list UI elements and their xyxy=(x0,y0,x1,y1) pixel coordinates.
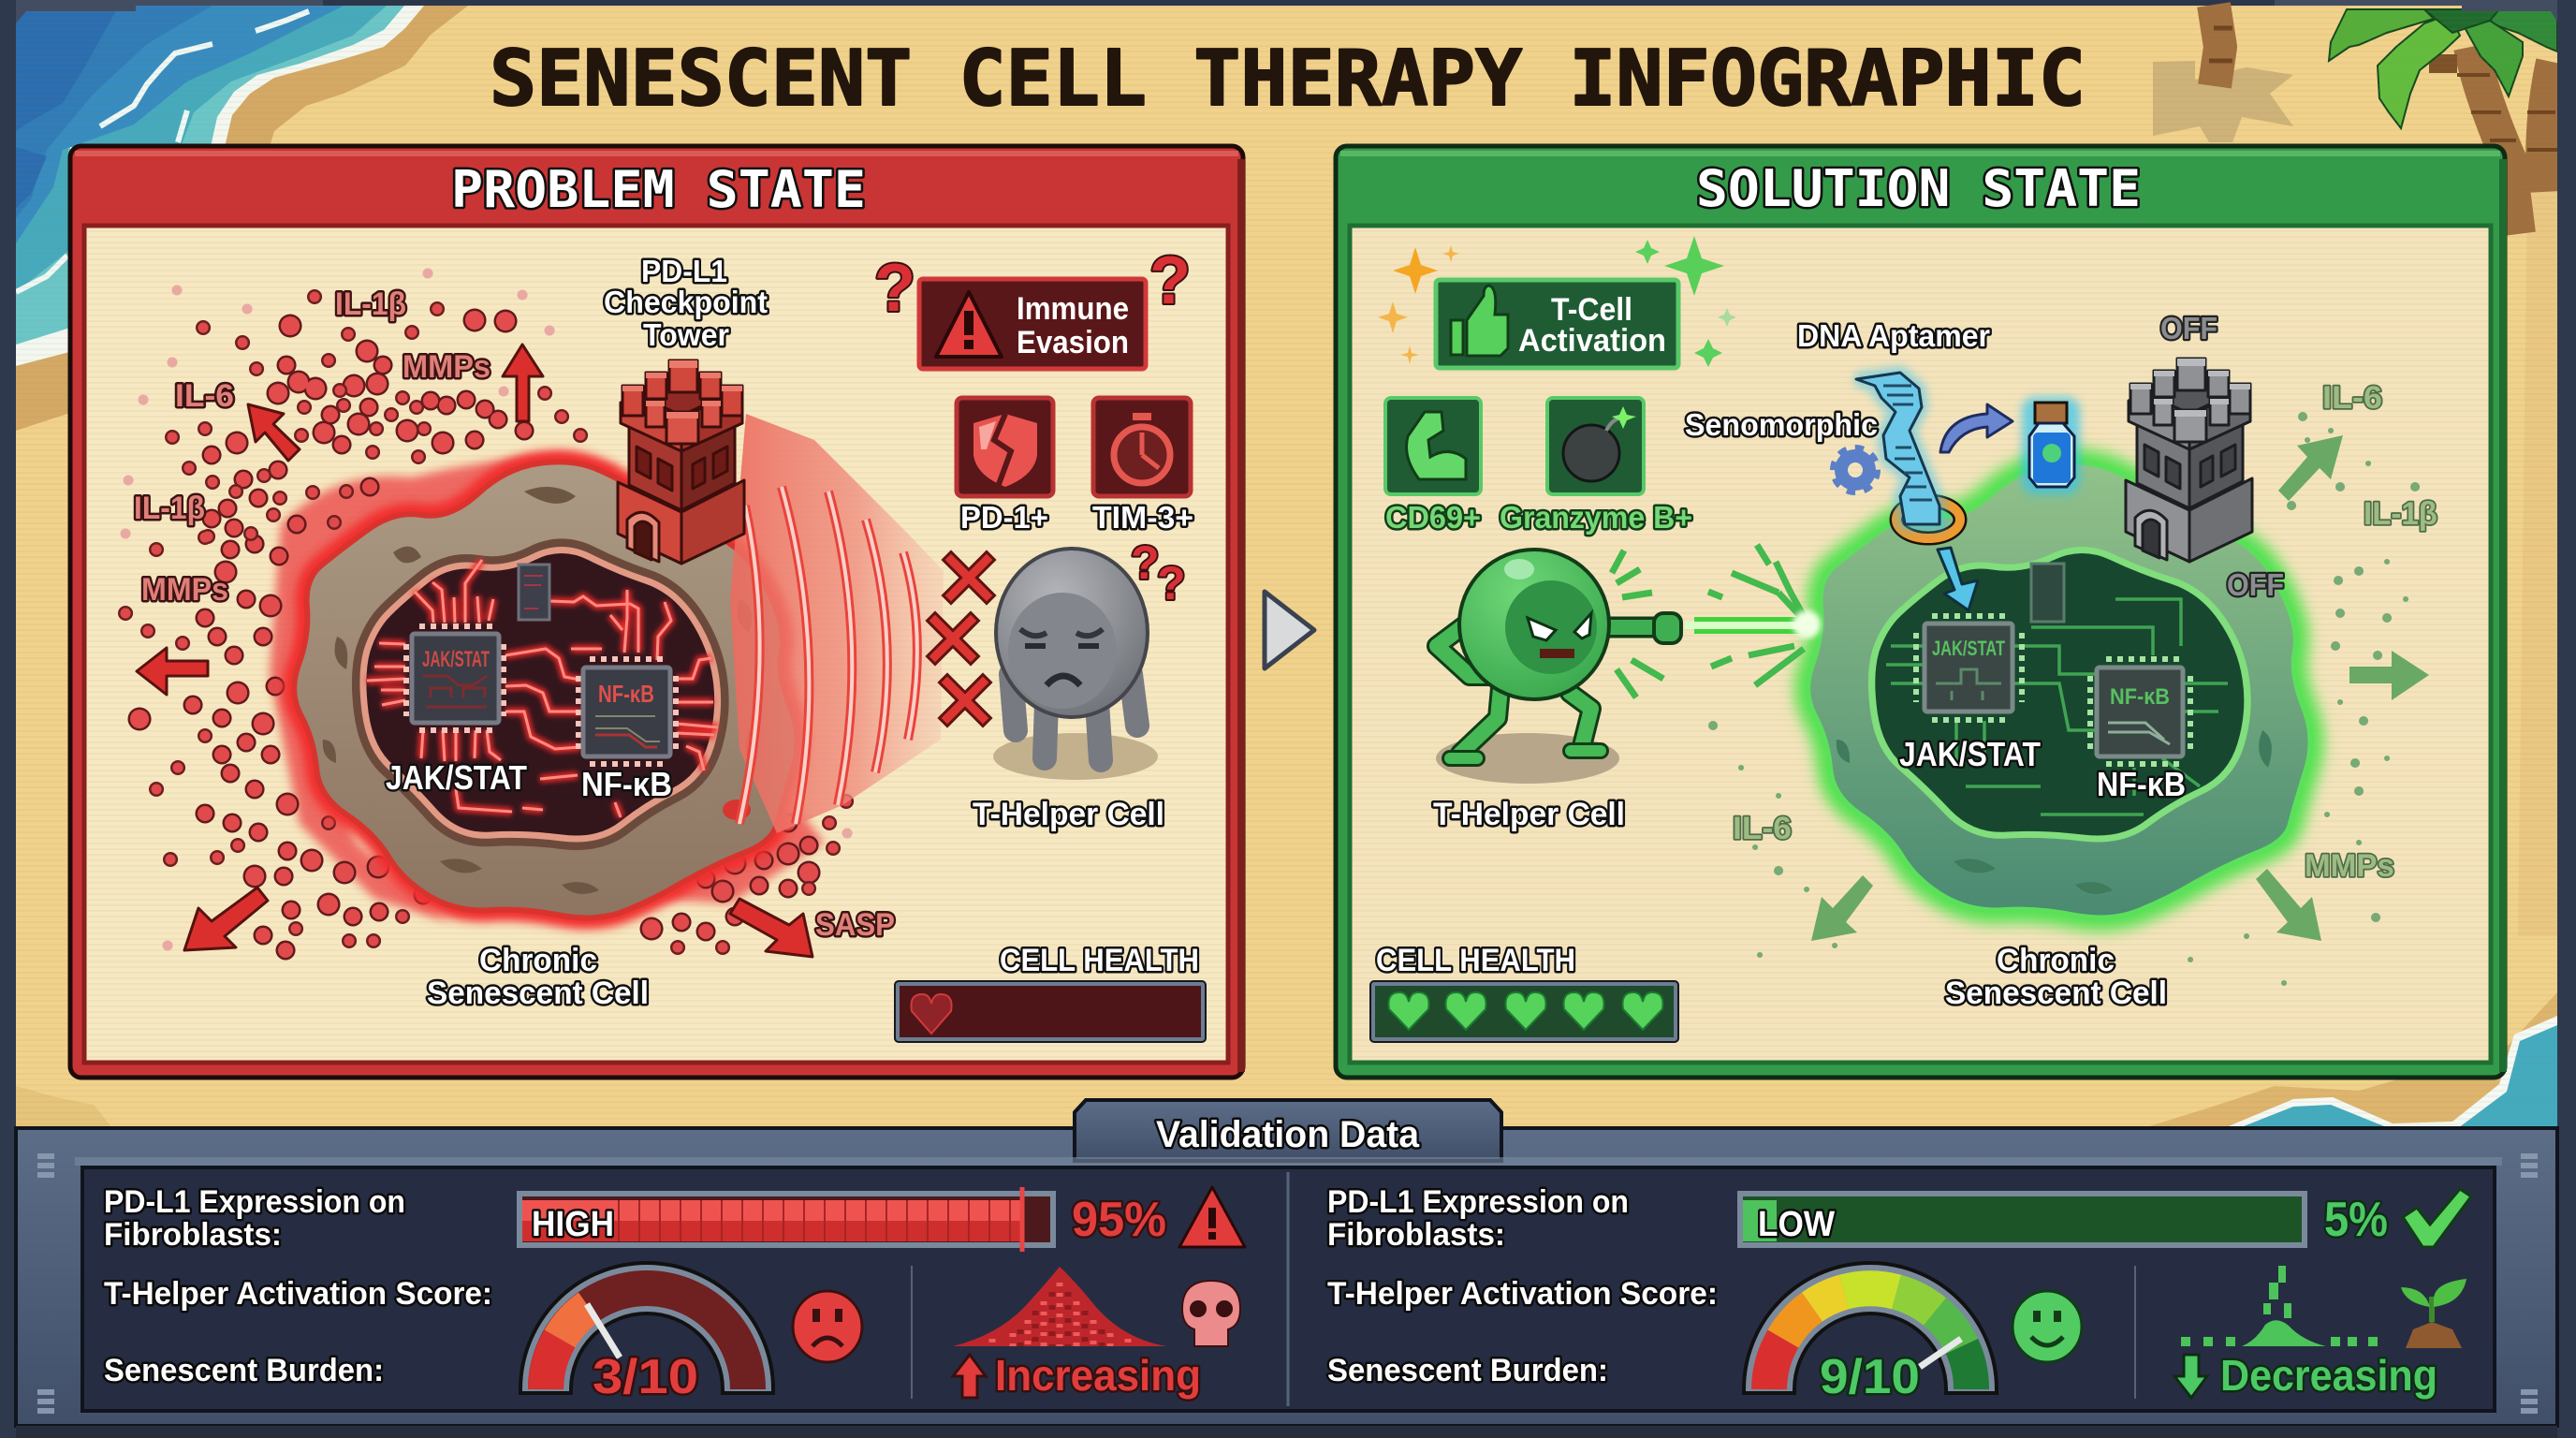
SASP arrows xyxy=(137,345,812,957)
faded cytokine labels: IL-1β xyxy=(2364,496,2437,532)
label: NF-kB: NF-κB xyxy=(2097,765,2186,803)
cytokine labels: IL-1β xyxy=(134,491,205,526)
panel: validation data xyxy=(16,1100,2557,1438)
icon: PD-L1 checkpoint tower (red) xyxy=(618,360,744,564)
metrics: solution side xyxy=(1327,1184,2471,1404)
label: NF-kB: NF-κB xyxy=(581,765,672,803)
icon: shrinking burden pile xyxy=(2181,1266,2378,1346)
label: PD-1+: PD-1+ xyxy=(960,500,1048,535)
callout: immune evasion: Immune xyxy=(1017,291,1129,327)
panel: solution state xyxy=(1336,146,2507,1078)
icon: burden pile xyxy=(953,1267,1166,1346)
bar: PD-L1 high: HIGH xyxy=(532,1205,614,1244)
cell health: depleted xyxy=(895,943,1206,1042)
faded cytokine labels: MMPs xyxy=(2305,848,2394,884)
label: T-helper score: T-Helper Activation Score: xyxy=(104,1276,492,1312)
label: senescent burden: Senescent Burden: xyxy=(1327,1353,1608,1388)
gauge: 3/10 xyxy=(546,1288,748,1404)
heading: solution state: SOLUTION STATE xyxy=(1696,159,2141,218)
cell health: depleted: CELL HEALTH xyxy=(1000,943,1199,978)
icon: warning xyxy=(1179,1187,1245,1247)
callout: T-cell activation: T-Cell xyxy=(1551,292,1632,328)
label: OFF (tower): OFF xyxy=(2160,311,2217,345)
question marks: ? xyxy=(1157,557,1186,609)
icon: sad face xyxy=(793,1291,862,1362)
gauge: 9/10 xyxy=(1769,1288,1971,1404)
character: exhausted T-helper cell xyxy=(993,549,1158,780)
label: OFF (signalling): OFF xyxy=(2227,567,2284,602)
label: chronic senescent cell: Chronic xyxy=(1997,943,2115,978)
icon: PD-1 broken shield xyxy=(957,398,1053,496)
faded cytokine labels xyxy=(1733,380,2437,884)
label: chronic senescent cell: Chronic xyxy=(479,943,597,978)
icon: seedling xyxy=(2401,1279,2466,1348)
heading: problem state: PROBLEM STATE xyxy=(451,160,866,219)
tab: validation data xyxy=(1075,1100,1501,1161)
chip: JAK/STAT: JAK/STAT xyxy=(422,647,490,672)
palm trunks xyxy=(2209,5,2557,234)
question marks: ? xyxy=(874,251,915,326)
chip: small xyxy=(519,565,549,620)
residual green particles xyxy=(1713,417,2415,983)
tab: validation data: Validation Data xyxy=(1156,1114,1420,1155)
label: PD-L1 checkpoint tower: Checkpoint xyxy=(604,285,768,319)
arrow: aptamer down to JAK/STAT xyxy=(1938,548,1978,610)
bar: PD-L1 high xyxy=(520,1187,1053,1252)
label: JAK/STAT: JAK/STAT xyxy=(386,758,527,797)
cell health: full: CELL HEALTH xyxy=(1376,943,1575,978)
callout: immune evasion xyxy=(919,279,1146,369)
bar: PD-L1 low: LOW xyxy=(1758,1205,1835,1244)
icon: DNA aptamer helix xyxy=(1856,373,1960,538)
label: chronic senescent cell xyxy=(427,943,649,1011)
arrow: aptamer to senomorphic xyxy=(1940,404,2012,452)
label: PD-L1 checkpoint tower xyxy=(604,254,768,352)
icon: warning triangle xyxy=(936,292,1002,357)
label: PD-L1 expression: Fibroblasts: xyxy=(104,1217,282,1253)
icon: senomorphic bottle xyxy=(2022,397,2080,494)
label: T-helper score: T-Helper Activation Score: xyxy=(1327,1276,1718,1312)
label: PD-L1 expression xyxy=(104,1184,405,1253)
faded arrows xyxy=(1811,435,2429,941)
palm shadow xyxy=(2153,61,2293,142)
question marks: ? xyxy=(1131,536,1160,589)
signal cone from tower xyxy=(730,414,944,833)
icon: gear xyxy=(1834,448,1877,492)
icon: TIM-3 stopwatch xyxy=(1093,398,1191,496)
label: senomorphic: Senomorphic xyxy=(1685,407,1878,442)
callout: T-cell activation xyxy=(1436,280,1678,368)
circuit traces xyxy=(1886,599,2228,814)
cytokine labels: IL-6 xyxy=(175,378,234,414)
sparkles xyxy=(1378,236,1736,367)
label: CD69+: CD69+ xyxy=(1385,500,1481,535)
cell: chronic senescent (problem) xyxy=(294,462,798,917)
label: senescent burden: Senescent Burden: xyxy=(104,1353,384,1388)
value: 5%: 5% xyxy=(2324,1193,2388,1247)
gauge: 3/10: 3/10 xyxy=(593,1350,698,1404)
trend: decreasing: Decreasing xyxy=(2220,1351,2437,1400)
label: T-helper cell: T-Helper Cell xyxy=(973,797,1164,832)
icon: blocked X marks xyxy=(935,560,987,718)
cell: chronic senescent (solution) xyxy=(1808,462,2311,917)
arrow: problem to solution xyxy=(1265,592,1314,668)
metrics: problem side xyxy=(104,1184,1245,1404)
cytokine labels: MMPs xyxy=(141,572,228,608)
question marks xyxy=(874,243,1191,609)
callout: T-cell activation: Activation xyxy=(1518,323,1666,359)
chip: JAK/STAT: JAK/STAT xyxy=(1932,637,2005,660)
energy beam xyxy=(1612,545,1821,697)
chip: NF-kB: NF-κB xyxy=(2110,684,2170,710)
label: TIM-3+: TIM-3+ xyxy=(1092,500,1193,535)
label: PD-L1 checkpoint tower: Tower xyxy=(643,317,729,352)
chip: small xyxy=(2031,564,2064,622)
circuit traces xyxy=(367,560,718,817)
icon: thumbs up xyxy=(1451,286,1508,356)
palm fronds xyxy=(2329,9,2557,128)
label: PD-L1 expression xyxy=(1327,1184,1629,1253)
cytokine labels: SASP xyxy=(815,907,895,943)
faded cytokine labels: IL-6 xyxy=(1733,811,1792,846)
label: PD-L1 expression: PD-L1 Expression on xyxy=(1327,1184,1629,1220)
label: DNA aptamer: DNA Aptamer xyxy=(1797,318,1990,353)
gauge: 9/10: 9/10 xyxy=(1820,1350,1920,1404)
label: PD-L1 expression: PD-L1 Expression on xyxy=(104,1184,405,1220)
icon: skull xyxy=(1182,1281,1240,1346)
cytokine labels: MMPs xyxy=(402,349,490,385)
label: chronic senescent cell: Senescent Cell xyxy=(427,976,649,1011)
trend: increasing: Increasing xyxy=(995,1351,1201,1400)
label: PD-L1 checkpoint tower: PD-L1 xyxy=(641,254,727,288)
icon: PD-L1 tower switched off (grey) xyxy=(2126,359,2252,562)
callout: immune evasion: Evasion xyxy=(1017,325,1129,360)
label: chronic senescent cell xyxy=(1945,943,2167,1011)
cytokine labels: IL-1β xyxy=(335,286,406,322)
bar: PD-L1 low xyxy=(1740,1194,2305,1245)
label: granzyme B+: Granzyme B+ xyxy=(1500,500,1692,535)
question marks: ? xyxy=(1149,243,1191,318)
faded cytokine labels: IL-6 xyxy=(2322,380,2382,416)
chip: JAK/STAT xyxy=(412,634,499,723)
icon: granzyme bomb xyxy=(1547,398,1644,494)
SASP particle cloud xyxy=(125,273,847,950)
label: chronic senescent cell: Senescent Cell xyxy=(1945,976,2167,1011)
chip: NF-kB: NF-κB xyxy=(598,680,654,708)
value: 95%: 95% xyxy=(1072,1193,1166,1247)
icon: happy face xyxy=(2012,1291,2082,1362)
chip: NF-kB xyxy=(2097,668,2183,756)
cytokine labels xyxy=(134,286,895,943)
chip: NF-kB xyxy=(583,668,670,756)
label: PD-L1 expression: Fibroblasts: xyxy=(1327,1217,1505,1253)
label: JAK/STAT: JAK/STAT xyxy=(1899,735,2041,773)
title: SENESCENT CELL THERAPY INFOGRAPHIC xyxy=(490,35,2086,124)
icon: check mark xyxy=(2403,1189,2471,1247)
character: activated T-helper cell xyxy=(1436,550,1681,784)
chip: JAK/STAT xyxy=(1925,624,2012,712)
cell health: full xyxy=(1370,943,1678,1042)
label: T-helper cell: T-Helper Cell xyxy=(1433,797,1625,832)
panel: problem state xyxy=(70,146,1245,1078)
icon: CD69 muscle xyxy=(1385,398,1481,494)
